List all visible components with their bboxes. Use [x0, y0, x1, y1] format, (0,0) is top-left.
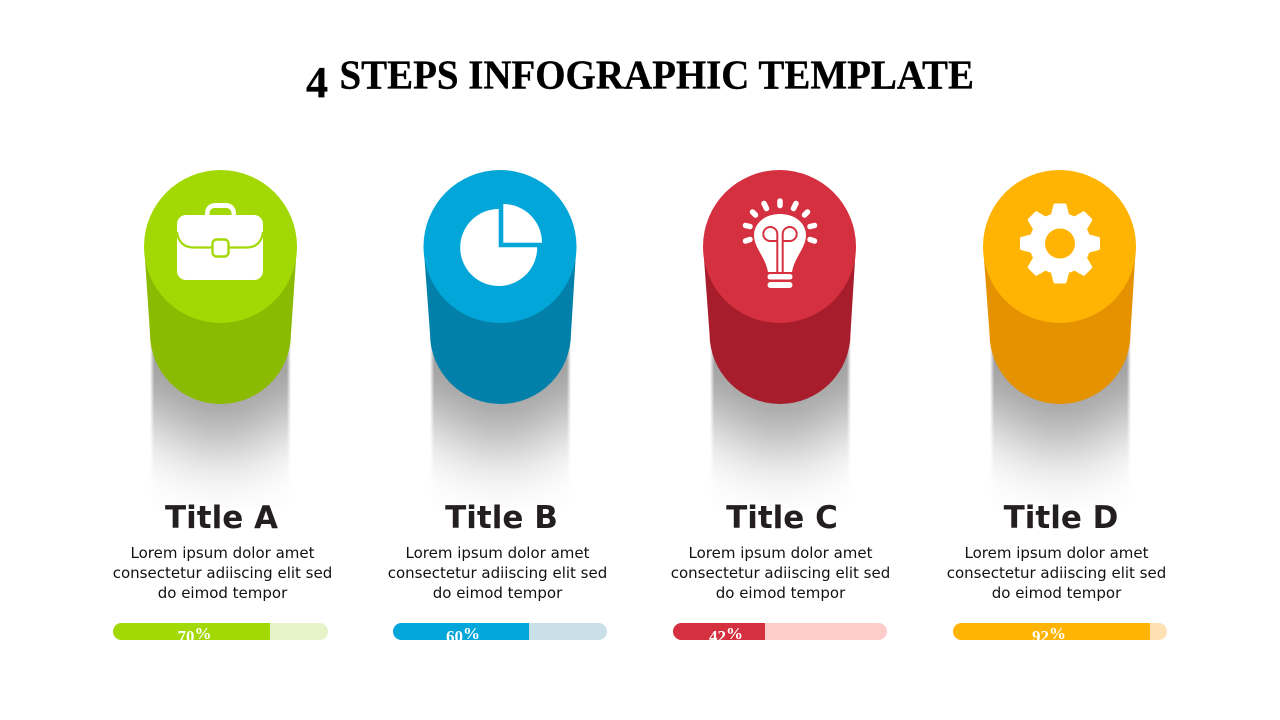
- cylinder shadow C: [710, 338, 850, 492]
- icon: light bulb: [746, 201, 814, 288]
- cylinder shadow B: [430, 343, 570, 492]
- progress bar D: %: [1049, 624, 1066, 643]
- text block C: Lorem ipsum dolor amet: [688, 544, 873, 562]
- progress bar B: [393, 623, 607, 640]
- icon: pie chart: [460, 204, 542, 286]
- cylinder body A: [144, 252, 296, 404]
- panel: step B: [388, 170, 607, 640]
- progress bar A: 70: [178, 627, 194, 646]
- progress bar B: 60: [446, 627, 463, 646]
- text block B: consectetur adiiscing elit sed: [388, 564, 607, 582]
- heading: Title B: Title B: [445, 500, 558, 536]
- cylinder top B: [424, 170, 576, 323]
- cylinder shadow A: [150, 343, 290, 492]
- text block C: do eimod tempor: [716, 584, 846, 602]
- cylinder shadow D: [990, 338, 1130, 492]
- text block A: do eimod tempor: [158, 584, 288, 602]
- cylinder body D: [984, 252, 1136, 404]
- text block C: consectetur adiiscing elit sed: [671, 564, 890, 582]
- panel: step A: [113, 170, 331, 640]
- text block B: Lorem ipsum dolor amet: [406, 544, 590, 562]
- progress bar D: 92: [1032, 627, 1049, 646]
- cylinder top A: [144, 170, 297, 323]
- progress bar B: %: [463, 624, 480, 643]
- text block D: do eimod tempor: [992, 584, 1122, 602]
- panel: step D: [948, 170, 1167, 640]
- progress bar C: [673, 623, 887, 640]
- cylinder body B: [424, 252, 576, 404]
- text block D: Lorem ipsum dolor amet: [964, 544, 1149, 562]
- progress bar A: %: [194, 624, 212, 643]
- title: STEPS INFOGRAPHIC TEMPLATE: [340, 52, 974, 98]
- text block B: do eimod tempor: [433, 584, 563, 602]
- progress bar A: [113, 623, 328, 640]
- progress bar C: 42: [709, 627, 726, 646]
- text block A: Lorem ipsum dolor amet: [130, 544, 315, 562]
- cylinder top C: [703, 170, 856, 323]
- icon: gear: [1022, 205, 1098, 282]
- text block A: consectetur adiiscing elit sed: [113, 564, 332, 582]
- heading: Title A: Title A: [165, 500, 278, 536]
- progress bar C: %: [726, 624, 743, 643]
- cylinder body C: [704, 252, 856, 404]
- progress bar D: [953, 623, 1167, 640]
- icon: briefcase: [177, 203, 263, 280]
- heading: Title C: Title C: [726, 500, 838, 536]
- title: 4: [306, 58, 328, 107]
- cylinder top D: [983, 170, 1136, 323]
- text block D: consectetur adiiscing elit sed: [947, 564, 1166, 582]
- panel: step C: [672, 170, 889, 640]
- heading: Title D: Title D: [1004, 500, 1118, 536]
